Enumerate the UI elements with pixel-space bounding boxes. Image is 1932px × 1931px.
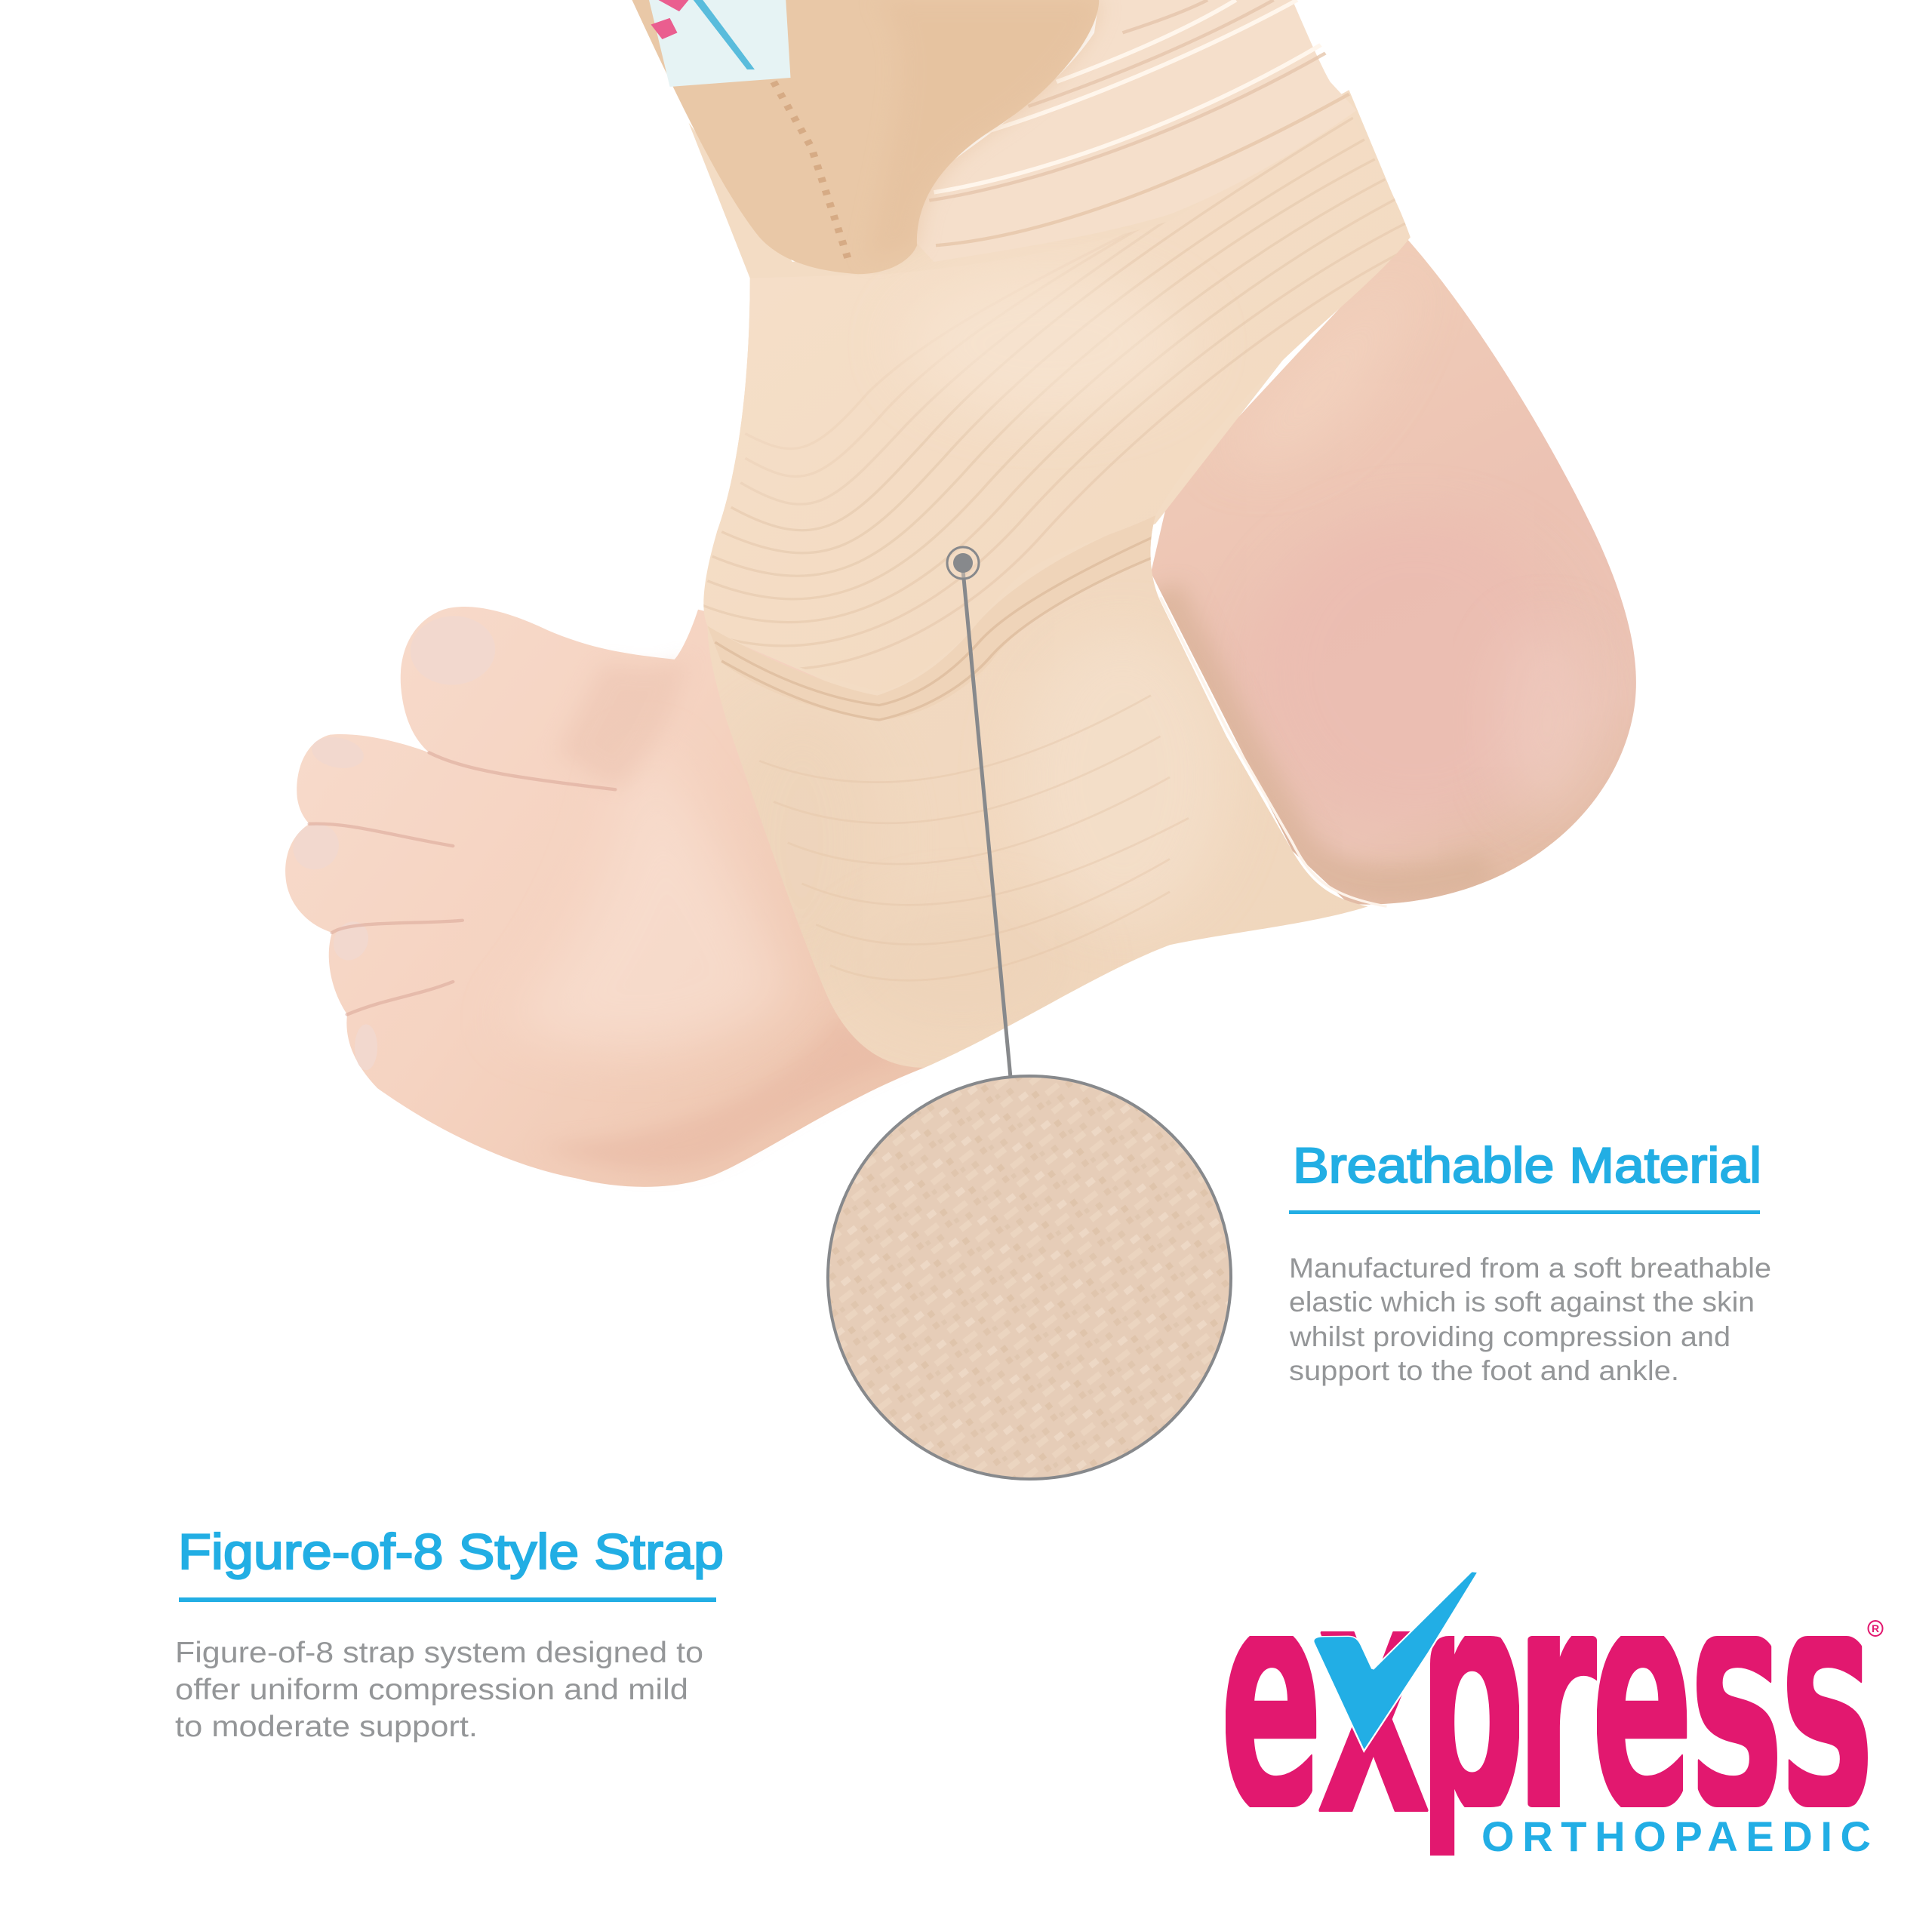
toe creases	[309, 752, 615, 1014]
text: ORTHOPAEDIC: ORTHOPAEDIC	[1481, 1813, 1871, 1860]
compression wrap around ankle	[698, 106, 1415, 691]
toe nails	[288, 610, 502, 1070]
mesh fabric under the ankle	[708, 515, 1387, 1068]
description text	[1289, 1253, 1771, 1386]
fabric underlay joining the support pieces	[688, 90, 1411, 703]
icon: blue check mark	[1314, 1572, 1477, 1749]
foot and toes	[285, 607, 981, 1187]
registered mark: R	[1872, 1622, 1879, 1634]
feature: Figure-of-8 Style Strap	[175, 1524, 724, 1743]
description text	[175, 1637, 703, 1743]
description text: support to the foot and ankle.	[1289, 1355, 1679, 1386]
divider rule	[179, 1597, 716, 1602]
wordmark: express: r	[1514, 1510, 1601, 1887]
description text: to moderate support.	[175, 1711, 478, 1743]
elastic strap	[915, 0, 1357, 262]
logo: express orthopaedic	[1226, 1572, 1884, 1856]
tan closure patch	[632, 0, 1099, 274]
brand label on the patch	[649, 0, 791, 87]
callout pointer: line from ankle to fabric detail	[947, 547, 1011, 1078]
wordmark: express: e	[1220, 1510, 1323, 1887]
wordmark: express: p	[1413, 1510, 1526, 1887]
description text: Figure-of-8 strap system designed to	[175, 1637, 703, 1669]
wordmark: express: s	[1689, 1510, 1784, 1887]
wordmark: express: e	[1591, 1510, 1694, 1887]
heel skin	[1151, 237, 1636, 905]
description text: offer uniform compression and mild	[175, 1674, 688, 1706]
registered mark	[1869, 1621, 1882, 1636]
divider rule	[1289, 1210, 1760, 1214]
wordmark: express	[1226, 1631, 1868, 1856]
magnified fabric detail circle	[828, 1076, 1231, 1479]
feature: Breathable Material	[1289, 1137, 1771, 1386]
description text: whilst providing compression and	[1289, 1321, 1730, 1352]
product photo: foot wearing ankle support	[285, 0, 1636, 1187]
description text: Manufactured from a soft breathable	[1289, 1253, 1771, 1284]
description text: elastic which is soft against the skin	[1289, 1287, 1755, 1318]
heading: Breathable Material: Breathable Material	[1293, 1137, 1761, 1193]
heading: Figure-of-8 Style Strap: Figure-of-8 Style Strap	[178, 1524, 724, 1579]
wordmark: express: x	[1317, 1510, 1430, 1887]
